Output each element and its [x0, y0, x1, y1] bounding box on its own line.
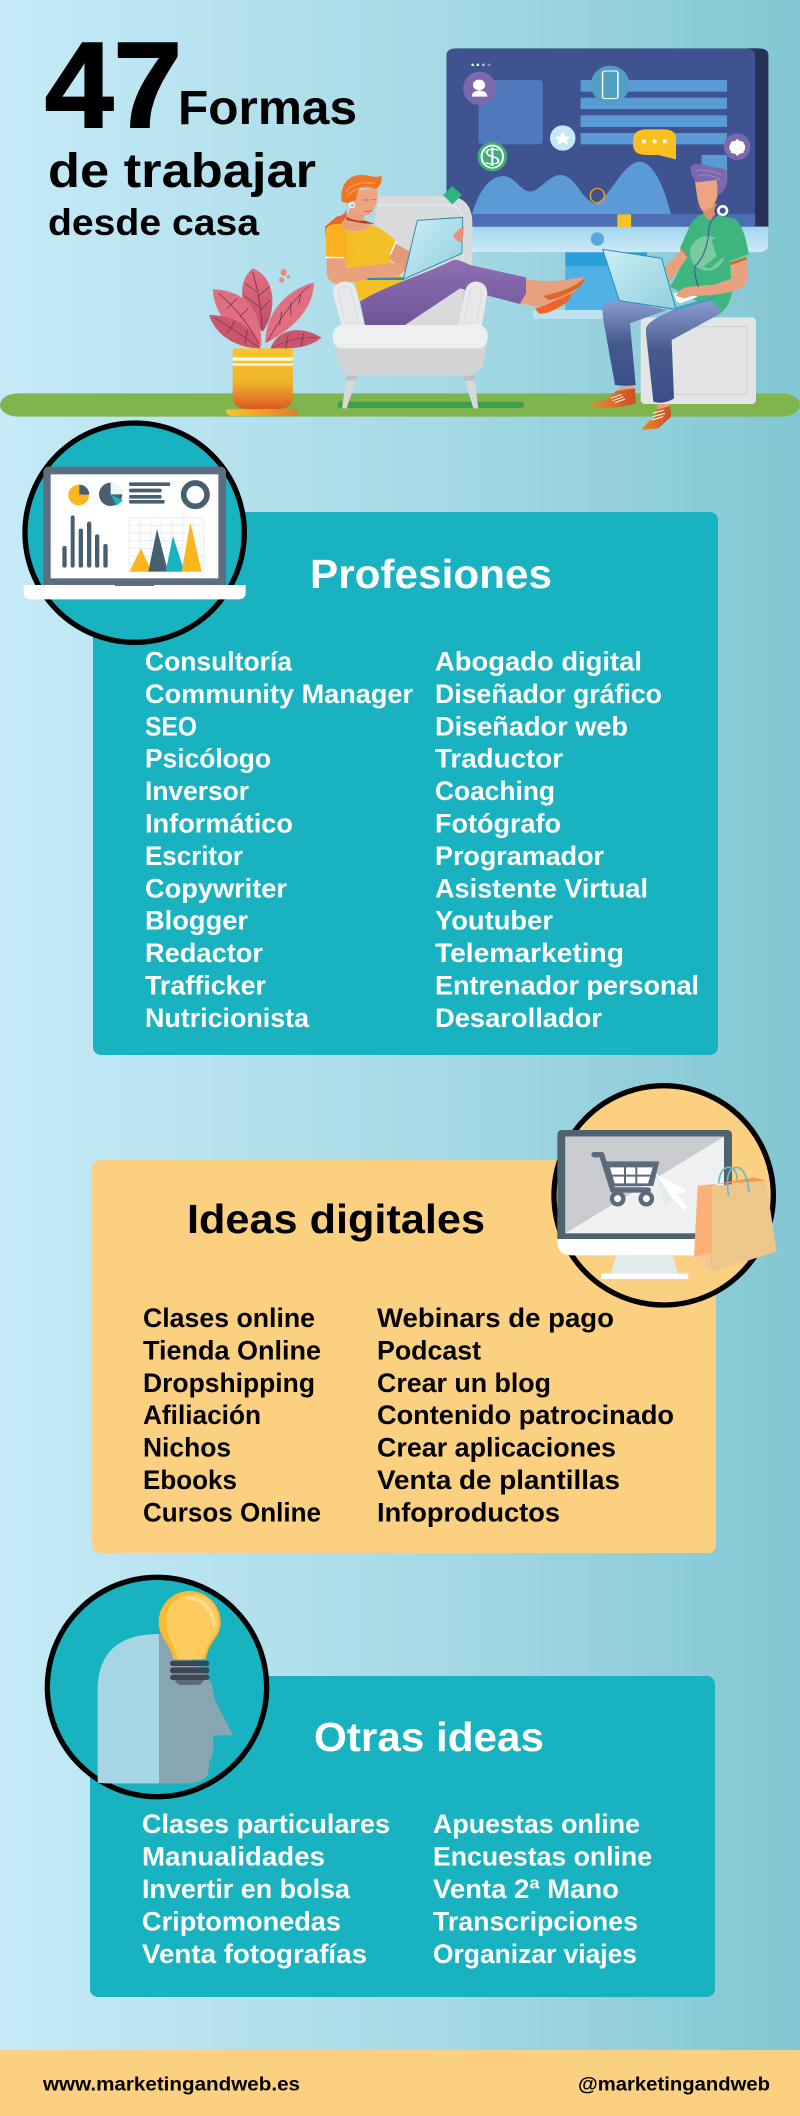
text block: otras column 1: Manualidades — [142, 1842, 325, 1872]
icon: monitor with shopping cart and bag — [554, 1086, 777, 1305]
text block: otras column 2: Apuestas online — [433, 1809, 640, 1839]
panel: otras ideas — [90, 1676, 715, 1997]
text block: profesiones column 1: Copywriter — [145, 873, 287, 903]
text block: profesiones column 1 — [145, 646, 413, 1033]
text block: ideas column 2 — [377, 1303, 674, 1527]
text block: otras column 2: Encuestas online — [433, 1842, 652, 1872]
text block: ideas column 1: Tienda Online — [143, 1335, 321, 1365]
woman — [325, 175, 585, 325]
text block: profesiones column 1: Consultoría — [145, 646, 292, 676]
text block: ideas column 1: Ebooks — [143, 1465, 237, 1495]
text block: profesiones column 2: Diseñador web — [435, 711, 628, 741]
text block: ideas column 1: Clases online — [143, 1303, 315, 1333]
text block: profesiones column 1: Psicólogo — [145, 744, 271, 774]
text block: profesiones column 2: Desarollador — [435, 1003, 602, 1033]
text block: profesiones column 1: Escritor — [145, 841, 243, 871]
text block: otras column 1 — [142, 1809, 390, 1969]
text block: profesiones column 1: Informático — [145, 808, 293, 838]
text block: ideas column 2: Contenido patrocinado — [377, 1400, 674, 1430]
title — [45, 17, 357, 243]
illustration: ground, monitor and plant — [0, 48, 800, 417]
panel: profesiones — [93, 512, 718, 1055]
text block: otras column 1: Venta fotografías — [142, 1939, 367, 1969]
text block: ideas column 2: Podcast — [377, 1335, 481, 1365]
text block: profesiones column 2: Entrenador personal — [435, 970, 699, 1000]
text block: profesiones column 1: Trafficker — [145, 970, 266, 1000]
icon: armchair arms and seat — [333, 282, 488, 408]
title: desde casa — [48, 202, 259, 243]
text block: profesiones column 2: Programador — [435, 841, 604, 871]
text block: profesiones column 1: Redactor — [145, 938, 263, 968]
text block: profesiones column 1: Blogger — [145, 906, 248, 936]
text block: ideas column 2: Crear un blog — [377, 1368, 551, 1398]
title: 47 — [45, 17, 182, 153]
figure: woman in armchair — [325, 175, 585, 408]
icon: plant in pot — [209, 268, 321, 416]
footer: website: www.marketingandweb.es — [42, 2074, 300, 2096]
text block: profesiones column 1: Nutricionista — [145, 1003, 309, 1033]
text block: profesiones column 2: Coaching — [435, 776, 555, 806]
title: Formas — [178, 82, 357, 135]
man — [590, 164, 749, 430]
footer: handle: @marketingandweb — [578, 2074, 770, 2096]
text block: ideas column 2: Venta de plantillas — [377, 1465, 620, 1495]
heading: otras ideas: Otras ideas — [314, 1714, 544, 1760]
text block: profesiones column 2 — [435, 646, 699, 1033]
footer — [0, 2050, 800, 2116]
text block: profesiones column 1: Inversor — [145, 776, 249, 806]
text block: profesiones column 2: Fotógrafo — [435, 808, 561, 838]
text block: otras column 2: Venta 2ª Mano — [433, 1874, 619, 1904]
text block: otras column 2: Transcripciones — [433, 1906, 638, 1936]
icon: cube seat — [641, 317, 756, 404]
text block: ideas column 2: Infoproductos — [377, 1497, 560, 1527]
text block: otras column 1: Criptomonedas — [142, 1906, 341, 1936]
heading: ideas digitales: Ideas digitales — [187, 1196, 485, 1242]
text block: otras column 2: Organizar viajes — [433, 1939, 637, 1969]
title: de trabajar — [48, 145, 316, 198]
text block: otras column 1: Clases particulares — [142, 1809, 390, 1839]
text block: ideas column 2: Webinars de pago — [377, 1303, 614, 1333]
text block: profesiones column 1: SEO — [145, 711, 197, 741]
text block: profesiones column 2: Diseñador gráfico — [435, 679, 662, 709]
icon: laptop with charts — [24, 423, 246, 642]
text block: otras column 2 — [433, 1809, 652, 1969]
text block: profesiones column 2: Youtuber — [435, 906, 553, 936]
text block: ideas column 1: Cursos Online — [143, 1497, 321, 1527]
text block: profesiones column 2: Telemarketing — [435, 938, 624, 968]
icon: monitor dashboard — [446, 48, 768, 319]
text block: profesiones column 2: Abogado digital — [435, 646, 642, 676]
text block: profesiones column 2: Traductor — [435, 744, 563, 774]
ground — [0, 393, 800, 417]
heading: profesiones: Profesiones — [310, 551, 552, 597]
text block: profesiones column 1: Community Manager — [145, 679, 413, 709]
text block: ideas column 1: Afiliación — [143, 1400, 261, 1430]
panel: ideas digitales — [92, 1160, 716, 1553]
text block: ideas column 1 — [143, 1303, 321, 1527]
figure: man with laptop on cube — [590, 164, 756, 430]
text block: ideas column 1: Dropshipping — [143, 1368, 315, 1398]
icon: green diamond — [443, 186, 462, 204]
icon: armchair back — [367, 196, 472, 327]
text block: profesiones column 2: Asistente Virtual — [435, 873, 648, 903]
text block: ideas column 1: Nichos — [143, 1433, 231, 1463]
text block: otras column 1: Invertir en bolsa — [142, 1874, 350, 1904]
icon: head with light bulb — [47, 1577, 267, 1797]
text block: ideas column 2: Crear aplicaciones — [377, 1433, 616, 1463]
